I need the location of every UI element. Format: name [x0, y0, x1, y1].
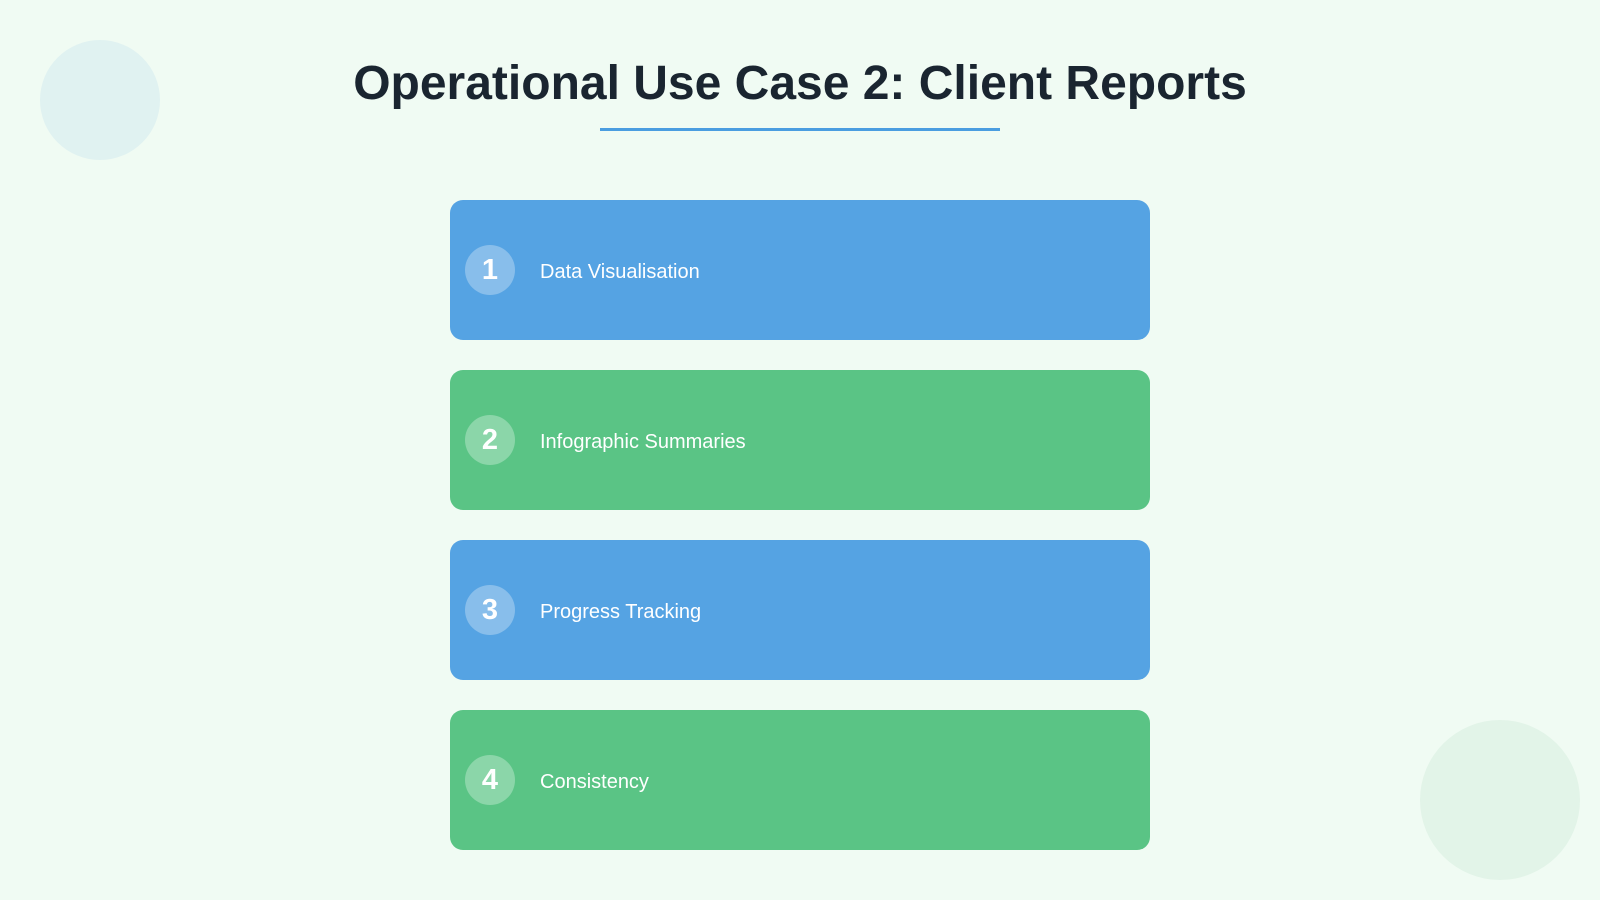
panel: item 1	[450, 200, 1150, 340]
decorative circle top-left	[40, 40, 160, 160]
panel: item 3	[450, 540, 1150, 680]
text: Consistency: Consistency	[540, 771, 649, 793]
icon: number 4	[465, 755, 515, 805]
icon: number 1	[465, 245, 515, 295]
icon: number 3: 3	[482, 594, 498, 626]
title underline	[600, 128, 1000, 131]
title: Operational Use Case 2: Client Reports	[353, 57, 1247, 110]
decorative circle bottom-right	[1420, 720, 1580, 880]
text: Data Visualisation: Data Visualisation	[540, 261, 700, 283]
icon: number 2	[465, 415, 515, 465]
panel: item 2	[450, 370, 1150, 510]
text: Progress Tracking: Progress Tracking	[540, 601, 701, 623]
icon: number 4: 4	[482, 764, 498, 796]
panel: item 4	[450, 710, 1150, 850]
text: Infographic Summaries: Infographic Summaries	[540, 431, 746, 453]
icon: number 3	[465, 585, 515, 635]
icon: number 1: 1	[482, 254, 498, 286]
icon: number 2: 2	[482, 424, 498, 456]
